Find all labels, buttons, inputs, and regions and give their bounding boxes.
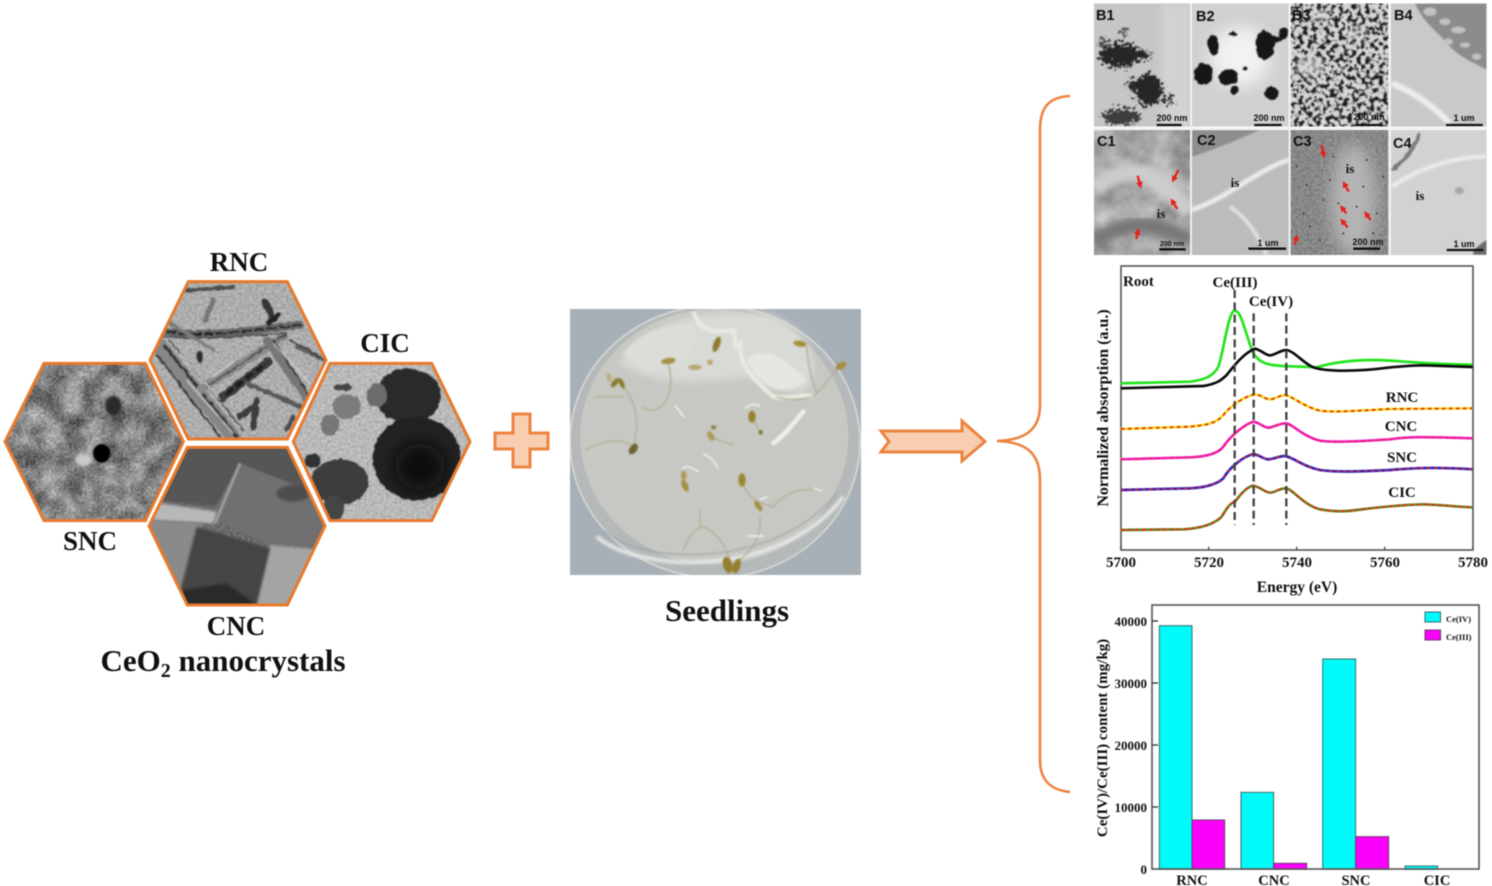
- panel gaps: [1094, 3, 1487, 255]
- y axis tick labels: 40000: [1114, 614, 1147, 629]
- x axis tick labels: 5780: [1458, 555, 1488, 571]
- scale bars: [1157, 125, 1483, 250]
- micrograph B4: [1391, 3, 1487, 127]
- x axis ticks: [1121, 546, 1473, 550]
- panel letters: B2: [1196, 9, 1215, 25]
- curve: CIC: [1121, 486, 1473, 530]
- chart: Ce(IV)/Ce(III) bar chart: [1095, 605, 1479, 886]
- chart: XANES line chart: CIC: [1388, 485, 1416, 501]
- micrograph C1: [1093, 130, 1190, 255]
- y axis tick labels: 10000: [1114, 800, 1147, 815]
- intercellular space labels: is: [1416, 188, 1424, 203]
- label: CNC: CNC: [207, 611, 265, 641]
- label: CIC: CIC: [360, 328, 410, 358]
- panel letters: B1: [1096, 8, 1115, 24]
- y axis tick labels: 20000: [1114, 738, 1147, 753]
- hexagon outlines: [5, 282, 470, 605]
- y axis tick labels: 30000: [1114, 676, 1147, 691]
- panel: seedlings petri dish photo: [570, 306, 861, 578]
- hexagon image: CIC irregular crystals: [290, 360, 473, 523]
- intercellular space labels: [1157, 161, 1424, 221]
- intercellular space labels: is: [1231, 175, 1239, 190]
- micrograph C2: [1192, 130, 1289, 255]
- micrograph C4: [1391, 130, 1487, 255]
- panel letters: B3: [1292, 8, 1311, 24]
- hexagon image: RNC nanorods: [147, 278, 330, 442]
- chart: XANES line chart: Ce(IV): [1249, 294, 1293, 310]
- scale bar labels: 200 nm: [1253, 113, 1285, 123]
- scale bar labels: 1 um: [1453, 239, 1475, 249]
- scale bar labels: 200 nm: [1160, 241, 1184, 248]
- reference line: black Ce(IV): [1121, 349, 1473, 388]
- scale bar labels: 1 um: [1257, 238, 1279, 248]
- panel: TEM micrographs: [1093, 3, 1487, 257]
- chart frame: [1121, 266, 1473, 550]
- panel letters: C4: [1393, 136, 1412, 152]
- arrow: to results: [881, 421, 985, 461]
- heading: Seedlings: Seedlings: [665, 593, 789, 628]
- micrograph C3: [1291, 130, 1388, 257]
- chart frame: [1152, 605, 1479, 869]
- scale bar labels: 200 nm: [1352, 237, 1384, 247]
- x axis tick labels: 5740: [1282, 555, 1312, 571]
- panel letters: B4: [1394, 8, 1413, 24]
- panel letters: C2: [1197, 133, 1216, 149]
- intercellular space labels: is: [1346, 161, 1354, 176]
- micrograph B3: [1291, 3, 1388, 127]
- heading: CeO2 nanocrystals: nanocrystals: [171, 643, 346, 678]
- seeds: [605, 336, 848, 574]
- chart: XANES line chart: RNC: [1386, 390, 1418, 406]
- chart: XANES line chart: CNC: [1385, 419, 1417, 435]
- scale bar labels: 1 um: [1453, 113, 1475, 123]
- x axis tick labels: [1106, 555, 1488, 571]
- panel letters: C1: [1097, 134, 1116, 150]
- curve: SNC: [1121, 454, 1473, 490]
- legend: Ce(IV): [1446, 614, 1471, 624]
- micrograph B1: [1094, 3, 1190, 127]
- x axis tick labels: 5720: [1194, 555, 1224, 571]
- scale bar labels: 200 nm: [1353, 112, 1385, 122]
- chart: XANES line chart: SNC: [1387, 450, 1417, 466]
- red arrows: [1136, 145, 1371, 245]
- scale bar labels: [1156, 112, 1475, 249]
- hexagon image: CNC nanocubes: [147, 445, 328, 608]
- reference dashed lines: [1235, 290, 1286, 525]
- curve: CNC: [1121, 422, 1473, 459]
- bars: [1159, 626, 1438, 869]
- x axis tick labels: 5700: [1106, 555, 1136, 571]
- y axis title: Ce(IV)/Ce(III) content (mg/kg): [1095, 639, 1111, 837]
- x axis title: Energy (eV): [1257, 579, 1337, 596]
- y axis ticks: [1152, 621, 1158, 807]
- micrograph B2: [1192, 3, 1289, 127]
- chart: XANES line chart: [1095, 266, 1488, 596]
- chart: XANES line chart: Ce(III): [1212, 275, 1258, 291]
- reference line: green Ce(III): [1121, 311, 1473, 383]
- label: RNC: RNC: [210, 247, 268, 277]
- legend: [1425, 612, 1472, 642]
- heading: CeO2 nanocrystals: 2: [161, 660, 171, 682]
- icon: plus sign: [495, 414, 548, 467]
- label: SNC: SNC: [63, 526, 117, 556]
- x axis category labels: [1176, 873, 1450, 886]
- scale bar labels: 200 nm: [1156, 113, 1188, 123]
- y axis tick labels: 0: [1140, 862, 1147, 877]
- panel letters: [1096, 8, 1413, 152]
- hexagon image: SNC nanoparticles: [2, 360, 187, 523]
- panel: CeO2 nanocrystal hexagons: [2, 247, 473, 641]
- y axis tick labels: [1114, 614, 1147, 877]
- legend: Ce(III): [1446, 632, 1472, 642]
- x axis tick labels: 5760: [1370, 555, 1400, 571]
- heading: CeO2 nanocrystals: CeO: [100, 643, 161, 678]
- panel letters: C3: [1293, 134, 1312, 150]
- curve: RNC: [1121, 394, 1473, 429]
- y axis title: Normalized absorption (a.u.): [1095, 309, 1112, 507]
- intercellular space labels: is: [1157, 206, 1165, 221]
- icon: curly brace: [997, 96, 1070, 792]
- chart labels: Root: [1123, 274, 1154, 290]
